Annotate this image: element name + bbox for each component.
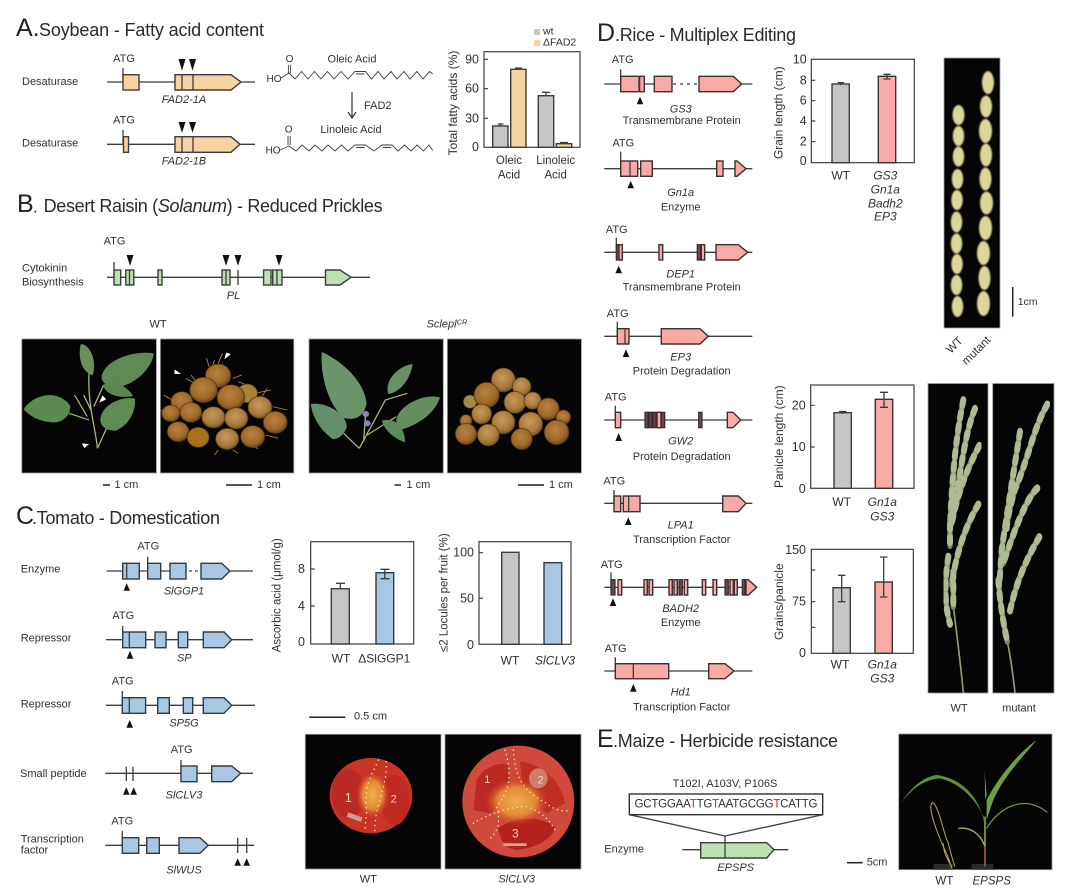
- label: mutant grains: mutant: [960, 334, 994, 368]
- bar chart: total fatty acids: Acid: [498, 170, 520, 182]
- photo: SlCLV3 tomato section: 2: [538, 775, 544, 787]
- bar chart: locules per fruit: 50: [460, 591, 474, 605]
- bar chart: ascorbic acid: Ascorbic acid (μmol/g): [271, 538, 283, 652]
- scale bar 5 cm: 5cm: [867, 857, 887, 869]
- scale bars: [103, 479, 573, 491]
- bar chart: grain length: 2: [800, 135, 807, 149]
- gene SlCLV3: [20, 744, 253, 801]
- heading B: B: [17, 190, 34, 218]
- gene SlCLV3: Small peptide: [20, 768, 87, 780]
- gene LPA1: Transcription Factor: [633, 534, 731, 546]
- chemical: oleic acid: Oleic Acid: [328, 53, 376, 65]
- label: WT grains: WT: [944, 335, 966, 356]
- heading D: .Rice - Multiplex Editing: [615, 25, 796, 45]
- gene SlWUS: factor: [21, 845, 49, 857]
- scale bar 1 cm: 1cm: [1018, 296, 1038, 308]
- gene EP3: ATG: [607, 308, 629, 320]
- gene LPA1: LPA1: [668, 520, 694, 532]
- bar chart: grain length: WT: [831, 169, 851, 183]
- gene GW2: ATG: [605, 392, 627, 404]
- bar chart: grain length: 4: [800, 114, 807, 128]
- gene GW2: [604, 392, 752, 463]
- bar chart: total fatty acids: ΔFAD2: [543, 37, 576, 49]
- gene GW2: Protein Degradation: [633, 451, 731, 463]
- heading D: D: [597, 19, 615, 47]
- chemical: linoleic acid: Linoleic Acid: [320, 124, 382, 136]
- heading E: [597, 725, 838, 753]
- gene SP: SP: [177, 652, 192, 664]
- gene SlCLV3: SlCLV3: [166, 789, 203, 801]
- bar chart: total fatty acids: 90: [465, 52, 479, 66]
- bar chart: ascorbic acid: [271, 538, 414, 665]
- bar chart: ascorbic acid: WT: [332, 651, 351, 665]
- gene SP5G: SP5G: [169, 718, 199, 730]
- bar chart: grain length: 8: [800, 73, 807, 87]
- bar chart: panicle length: GS3: [870, 509, 895, 523]
- bar chart: grain length: EP3: [874, 210, 897, 224]
- photo: Sclepl fruits without prickles: [447, 339, 581, 473]
- photo: rice grains: [944, 58, 1000, 328]
- photo: SlCLV3 tomato section: 3: [512, 826, 519, 840]
- gene SlCLV3: ATG: [171, 744, 193, 756]
- bar chart: grain length: 6: [800, 94, 807, 108]
- bar chart: locules per fruit: ≤2 Locules per fruit (%): [438, 533, 450, 652]
- bar chart: grains per panicle: WT: [831, 657, 850, 671]
- gene PL: [22, 235, 370, 302]
- gene Hd1: Hd1: [671, 687, 691, 699]
- gene DEP1: [604, 224, 752, 293]
- photo: WT tomato section: 2: [391, 793, 397, 805]
- gene BADH2: Enzyme: [661, 617, 701, 629]
- bar chart: total fatty acids: Linoleic: [536, 155, 575, 167]
- gene DEP1: ATG: [606, 224, 628, 236]
- gene Gn1a: Gn1a: [667, 187, 694, 199]
- chemical: oleic acid: HO: [266, 74, 282, 85]
- heading C: .Tomato - Domestication: [32, 508, 220, 528]
- photo: WT tomato section: 1: [345, 791, 352, 805]
- bar chart: locules per fruit: 0: [467, 638, 474, 652]
- gene GS3: ATG: [612, 54, 634, 66]
- chemical: linoleic acid: O: [285, 124, 293, 136]
- chemical: oleic acid: O: [286, 54, 294, 65]
- bar chart: panicle length: Gn1a: [868, 495, 897, 509]
- bar chart: grain length: Grain length (cm): [771, 66, 785, 159]
- bar chart: ascorbic acid: 0: [298, 635, 305, 649]
- photo: maize plants: [899, 734, 1052, 870]
- chemical: linoleic acid: [266, 124, 433, 156]
- bar chart: panicle length: [772, 385, 914, 523]
- gene SP5G: ATG: [112, 675, 134, 687]
- gene SlGGP1: [21, 541, 253, 598]
- gene FAD2-1B: Desaturase: [22, 138, 78, 150]
- heading A: [16, 14, 264, 42]
- gene Hd1: [604, 643, 752, 714]
- gene EP3: Protein Degradation: [633, 366, 731, 378]
- gene PL: PL: [227, 290, 240, 302]
- heading E: .Maize - Herbicide resistance: [613, 731, 838, 751]
- heading A: A.: [16, 14, 40, 42]
- label: WT: WT: [149, 318, 167, 330]
- gene Gn1a: Enzyme: [661, 201, 701, 213]
- gene FAD2-1A: FAD2-1A: [162, 94, 206, 106]
- scale bars: 1 cm: [257, 479, 281, 491]
- arrow: FAD2 conversion: [348, 92, 392, 118]
- panel B: desert raisin reduced prickles: [17, 190, 581, 491]
- label: WT panicle: WT: [950, 703, 968, 715]
- bar chart: grains per panicle: [772, 543, 913, 685]
- bar chart: grains per panicle: 75: [792, 595, 806, 609]
- gene DEP1: DEP1: [666, 268, 695, 280]
- panel E: maize herbicide resistance: [597, 725, 1052, 887]
- gene EP3: [604, 308, 752, 378]
- heading B: [17, 190, 383, 218]
- heading D: [597, 19, 796, 47]
- gene FAD2-1A: [22, 53, 255, 106]
- bar chart: panicle length: 10: [792, 440, 806, 454]
- gene FAD2-1B: ATG: [113, 114, 135, 126]
- gene SP: [21, 610, 253, 664]
- chemical: oleic acid: [266, 53, 433, 85]
- gene FAD2-1A: ATG: [113, 53, 135, 65]
- gene SlWUS: SlWUS: [166, 864, 202, 876]
- photo: WT panicle: [928, 384, 988, 693]
- bar chart: locules per fruit: WT: [501, 654, 520, 668]
- bar chart: ascorbic acid: ΔSlGGP1: [358, 651, 411, 665]
- gene GS3: [604, 54, 752, 127]
- gene SP: ATG: [112, 610, 134, 622]
- scale bars: 1 cm: [406, 479, 430, 491]
- gene Gn1a: ATG: [612, 138, 634, 150]
- gene Hd1: ATG: [605, 643, 627, 655]
- panel C: tomato domestication: [16, 502, 581, 885]
- panel A: soybean fatty acid content: [16, 14, 580, 182]
- gene FAD2-1B: [22, 114, 255, 168]
- gene EPSPS: EPSPS: [717, 862, 755, 874]
- gene SP5G: [21, 675, 255, 730]
- sequence box: GCTGGAATTGTAATGCGGTCATTG: [634, 798, 818, 810]
- sequence box: [629, 794, 823, 858]
- gene EPSPS: [604, 843, 788, 874]
- panel D: rice multiplex editing: [597, 19, 1054, 715]
- photo: SlCLV3 tomato section: [445, 734, 581, 869]
- gene EPSPS: Enzyme: [604, 844, 644, 856]
- label: WT tomato: WT: [360, 873, 377, 885]
- bar chart: locules per fruit: SlCLV3: [535, 654, 575, 668]
- heading B: .: [33, 198, 38, 216]
- gene GW2: GW2: [668, 436, 693, 448]
- scale bar 5 cm: [847, 857, 887, 869]
- gene DEP1: Transmembrane Protein: [623, 281, 741, 293]
- photo: WT tomato section: [305, 734, 441, 869]
- bar chart: grain length: GS3: [873, 169, 898, 183]
- bar chart: panicle length: 20: [792, 398, 806, 412]
- bar chart: grain length: Gn1a: [871, 183, 900, 197]
- gene BADH2: [601, 559, 757, 629]
- bar chart: total fatty acids: Total fatty acids (%): [446, 51, 460, 155]
- scale bars: 1 cm: [549, 479, 573, 491]
- gene PL: Biosynthesis: [22, 277, 84, 289]
- heading E: E: [597, 725, 614, 753]
- gene FAD2-1B: FAD2-1B: [162, 156, 206, 168]
- heading B: Desert Raisin (Solanum) - Reduced Prickles: [44, 196, 383, 216]
- label: SlCLV3 tomato: SlCLV3: [498, 873, 536, 885]
- label: EPSPS maize: EPSPS: [973, 875, 1011, 887]
- bar chart: grain length: 0: [800, 154, 807, 168]
- label: Sclepl CR: Sclepl: [427, 318, 457, 330]
- gene SlWUS: ATG: [111, 815, 133, 827]
- label: mutant panicle: mutant: [1002, 703, 1036, 715]
- bar chart: grains per panicle: GS3: [870, 671, 895, 685]
- bar chart: total fatty acids: 30: [465, 111, 479, 125]
- gene EP3: EP3: [670, 352, 692, 364]
- chemical: linoleic acid: HO: [266, 146, 281, 156]
- bar chart: grain length: 10: [793, 52, 807, 66]
- bar chart: locules per fruit: 100: [453, 546, 474, 560]
- label: Sclepl CR: CR: [457, 317, 468, 326]
- arrow: FAD2 conversion: FAD2: [364, 100, 392, 112]
- bar chart: ascorbic acid: 4: [298, 599, 305, 613]
- bar chart: total fatty acids: [446, 26, 580, 182]
- photo: WT fruits with prickles: [160, 339, 294, 473]
- bar chart: panicle length: Panicle length (cm): [772, 385, 786, 488]
- bar chart: grains per panicle: Grains/panicle: [772, 563, 786, 640]
- gene GS3: GS3: [670, 103, 693, 115]
- label: WT maize: WT: [935, 875, 953, 887]
- scale bar 0.5 cm: 0.5 cm: [354, 711, 387, 723]
- gene SlGGP1: Enzyme: [21, 563, 60, 575]
- gene LPA1: ATG: [603, 476, 625, 488]
- bar chart: total fatty acids: 0: [472, 140, 479, 154]
- bar chart: grains per panicle: 150: [785, 543, 806, 557]
- gene LPA1: [603, 476, 752, 546]
- gene Hd1: Transcription Factor: [633, 702, 731, 714]
- gene SP: Repressor: [21, 632, 72, 644]
- gene SlGGP1: ATG: [137, 541, 159, 553]
- gene SP5G: Repressor: [21, 698, 72, 710]
- photo: WT leaf: [22, 339, 156, 473]
- bar chart: grains per panicle: 0: [799, 646, 806, 660]
- bar chart: panicle length: WT: [832, 495, 852, 509]
- heading C: [16, 502, 220, 530]
- photo: SlCLV3 tomato section: 1: [484, 774, 490, 786]
- gene PL: ATG: [104, 235, 125, 247]
- gene GS3: Transmembrane Protein: [623, 115, 741, 127]
- photo: mutant panicle: [993, 384, 1054, 693]
- heading C: C: [16, 502, 34, 530]
- bar chart: panicle length: 0: [799, 482, 806, 496]
- scale bars: 1 cm: [114, 479, 138, 491]
- gene PL: Cytokinin: [22, 263, 67, 275]
- bar chart: ascorbic acid: 8: [298, 562, 305, 576]
- bar chart: total fatty acids: Oleic: [496, 155, 522, 167]
- bar chart: grain length: Badh2: [868, 196, 903, 210]
- scale bar 0.5 cm: [309, 711, 387, 723]
- gene SlWUS: [21, 815, 254, 876]
- bar chart: total fatty acids: 60: [465, 82, 479, 96]
- gene FAD2-1A: Desaturase: [22, 76, 78, 88]
- bar chart: total fatty acids: Acid: [545, 170, 567, 182]
- bar chart: grains per panicle: Gn1a: [868, 657, 897, 671]
- gene BADH2: ATG: [601, 559, 623, 571]
- bar chart: total fatty acids: wt: [542, 26, 554, 38]
- bar chart: locules per fruit: [438, 533, 575, 668]
- gene SlWUS: Transcription: [21, 833, 84, 845]
- bar chart: grain length: [771, 52, 914, 224]
- mutation labels: T102I, A103V, P106S: [673, 778, 777, 790]
- gene Gn1a: [604, 138, 752, 213]
- scale bar 1 cm: [1013, 287, 1038, 316]
- gene SlGGP1: SlGGP1: [164, 586, 204, 598]
- photo: Sclepl leaf: [309, 339, 443, 473]
- heading A: Soybean - Fatty acid content: [39, 20, 264, 40]
- gene BADH2: BADH2: [662, 603, 699, 615]
